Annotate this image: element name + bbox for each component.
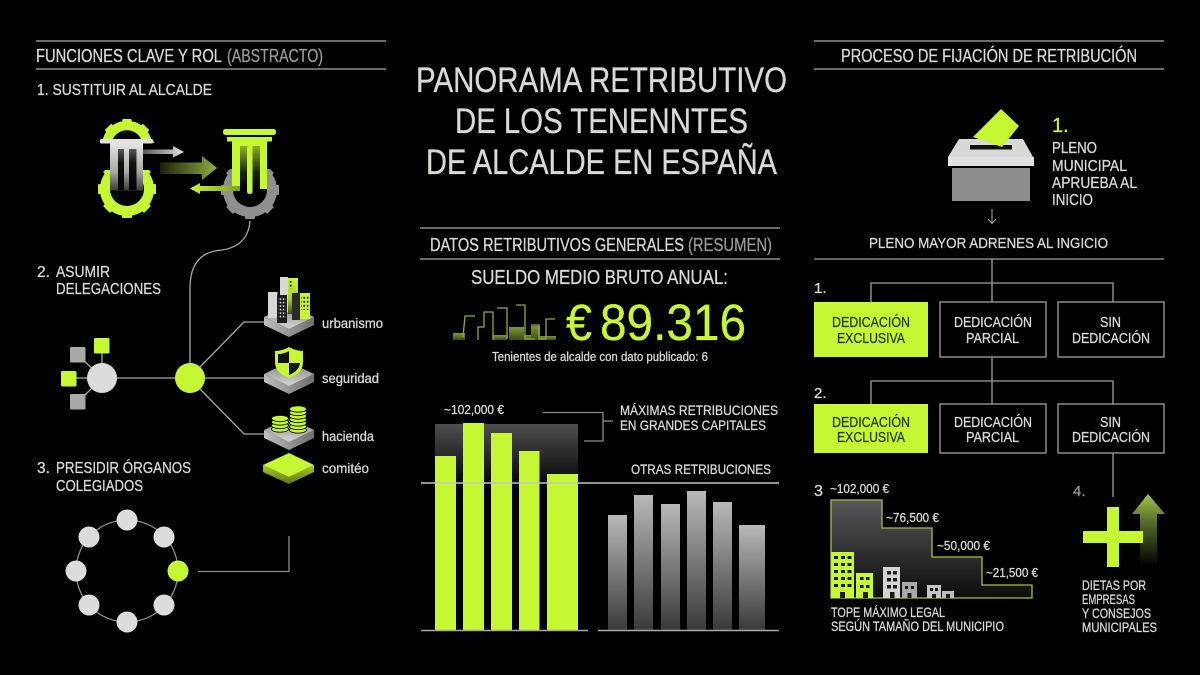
- chart: legal cap staircase: ~21,500 €: [986, 565, 1039, 580]
- step 1 text: INICIO: [1052, 192, 1093, 209]
- heading: funciones clave: FUNCIONES CLAVE Y ROL: [36, 45, 222, 66]
- box: sin dedicacion 2: SIN: [1100, 415, 1121, 431]
- box: dedicacion parcial 2: DEDICACIÓN: [954, 414, 1032, 431]
- chart: maximum retributions: ~102,000 €: [444, 402, 505, 417]
- heading: funciones clave: (ABSTRACTO): [227, 45, 323, 66]
- caption: dietas: Y CONSEJOS: [1082, 606, 1151, 621]
- bracket callout: maximas retribuciones: EN GRANDES CAPITALES: [620, 417, 766, 433]
- item: hacienda: hacienda: [322, 428, 374, 444]
- subheading: asumir delegaciones: ASUMIR: [56, 264, 110, 281]
- stat: average salary: 89.316: [600, 294, 746, 351]
- box: sin dedicacion 1: [1058, 302, 1164, 357]
- subheading: presidir organos colegiados: PRESIDIR ÓRGANOS: [56, 460, 191, 477]
- caption: dietas: MUNICIPALES: [1082, 620, 1157, 635]
- stat: average salary: €: [566, 294, 592, 351]
- icon: ballot box: [948, 109, 1034, 201]
- step 1 text: PLENO: [1052, 140, 1097, 157]
- subheading: presidir organos colegiados: 3.: [37, 460, 50, 477]
- subheading: asumir delegaciones: [37, 264, 161, 298]
- box: sin dedicacion 2: DEDICACIÓN: [1072, 429, 1150, 446]
- box: dedicacion parcial 1: DEDICACIÓN: [954, 314, 1032, 331]
- box: dedicacion parcial 1: PARCIAL: [966, 331, 1019, 347]
- item: seguridad: [264, 347, 379, 394]
- label: otras retribuciones: OTRAS RETRIBUCIONES: [631, 461, 771, 477]
- chart: legal cap staircase: [814, 481, 1039, 598]
- subheading: asumir delegaciones: DELEGACIONES: [56, 281, 161, 298]
- note: published data: Tenientes de alcalde con dato publicado: 6: [492, 350, 708, 364]
- connector lines: [814, 259, 1164, 497]
- chart: legal cap staircase: ~76,500 €: [886, 510, 940, 525]
- box: dedicacion exclusiva 2: EXCLUSIVA: [837, 430, 905, 446]
- step 1 text: [1052, 115, 1137, 209]
- panel: funciones clave y rol: [36, 41, 386, 632]
- panel: datos retributivos: [420, 228, 780, 630]
- icon: plus: [1083, 507, 1143, 567]
- arrow: olive right: [160, 156, 217, 180]
- title: DE ALCALDE EN ESPAÑA: [426, 143, 778, 182]
- box: sin dedicacion 2: [1058, 404, 1164, 453]
- heading: datos retributivos generales: DATOS RETRIBUTIVOS GENERALES: [430, 235, 684, 255]
- item: comiteo: [263, 453, 369, 484]
- step 1 text: MUNICIPAL: [1052, 158, 1127, 175]
- chart: maximum retributions: [435, 402, 578, 630]
- connector curve: [190, 221, 250, 364]
- title: PANORAMA RETRIBUTIVO: [416, 61, 787, 100]
- arrow: lime left: [190, 183, 240, 194]
- arrow: up: [1132, 494, 1165, 566]
- chart: other retributions: [608, 491, 765, 630]
- caption: tope maximo legal: TOPE MÁXIMO LEGAL: [831, 605, 945, 620]
- item: urbanismo: [264, 277, 383, 337]
- chart: legal cap staircase: ~50,000 €: [937, 538, 991, 553]
- item: hacienda: [264, 406, 374, 450]
- label: step 4: 4.: [1073, 483, 1086, 500]
- arrow: down: [988, 209, 996, 224]
- box: dedicacion exclusiva 1: EXCLUSIVA: [837, 331, 905, 347]
- subheading: presidir organos colegiados: [37, 460, 191, 495]
- label: sueldo medio: SUELDO MEDIO BRUTO ANUAL:: [471, 267, 728, 289]
- caption: tope maximo legal: [831, 605, 1004, 634]
- subheading: presidir organos colegiados: COLEGIADOS: [56, 478, 143, 495]
- icon: lime column on gray gear: [221, 129, 279, 219]
- panel: proceso de fijacion: [814, 41, 1165, 635]
- subheading: sustituir al alcalde: 1. SUSTITUIR AL ALCALDE: [37, 82, 212, 99]
- bracket callout: maximas retribuciones: MÁXIMAS RETRIBUCIONES: [620, 402, 778, 418]
- icon: column on lime gears: [98, 119, 156, 218]
- box: dedicacion exclusiva 2: DEDICACIÓN: [832, 414, 910, 431]
- heading: funciones clave: [36, 41, 386, 69]
- heading: datos retributivos generales: [420, 228, 780, 259]
- caption: dietas: [1082, 578, 1157, 635]
- heading: pleno mayor: PLENO MAYOR ADRENES AL INGICIO: [869, 235, 1108, 252]
- item: seguridad: seguridad: [322, 370, 379, 386]
- title: DE LOS TENENNTES: [455, 102, 748, 141]
- label: row 2: 2.: [814, 385, 827, 402]
- diagram: delegation hub: [61, 322, 266, 434]
- box: sin dedicacion 1: SIN: [1100, 315, 1121, 331]
- box: dedicacion exclusiva 1: [814, 302, 928, 357]
- bracket callout: maximas retribuciones: [543, 402, 778, 441]
- chart: legal cap staircase: 3: [814, 483, 823, 500]
- box: dedicacion exclusiva 1: DEDICACIÓN: [832, 314, 910, 331]
- buildings: [831, 552, 954, 598]
- step 1 text: APRUEBA AL: [1052, 175, 1137, 192]
- arrow: white right: [143, 146, 184, 158]
- box: dedicacion exclusiva 2: [814, 404, 928, 453]
- caption: tope maximo legal: SEGÚN TAMAÑO DEL MUNICIPIO: [831, 619, 1004, 634]
- item: urbanismo: urbanismo: [322, 315, 383, 331]
- box: sin dedicacion 1: DEDICACIÓN: [1072, 330, 1150, 347]
- sparkline skyline: [453, 305, 556, 340]
- subheading: asumir delegaciones: 2.: [37, 264, 50, 281]
- label: row 1: 1.: [814, 280, 827, 297]
- item: comiteo: comitéo: [322, 460, 369, 476]
- title: [416, 61, 787, 182]
- box: dedicacion parcial 2: PARCIAL: [966, 430, 1019, 446]
- diagram: collegiate ring: [66, 510, 289, 632]
- heading: proceso de fijacion: PROCESO DE FIJACIÓN DE RETRIBUCIÓN: [841, 45, 1137, 66]
- box: dedicacion parcial 1: [940, 302, 1046, 357]
- heading: datos retributivos generales: (RESUMEN): [688, 235, 772, 255]
- box: dedicacion parcial 2: [940, 404, 1046, 453]
- caption: dietas: DIETAS POR: [1082, 578, 1146, 593]
- caption: dietas: EMPRESAS: [1082, 592, 1135, 607]
- step 1 text: 1.: [1052, 115, 1069, 137]
- chart: legal cap staircase: ~102,000 €: [830, 481, 890, 496]
